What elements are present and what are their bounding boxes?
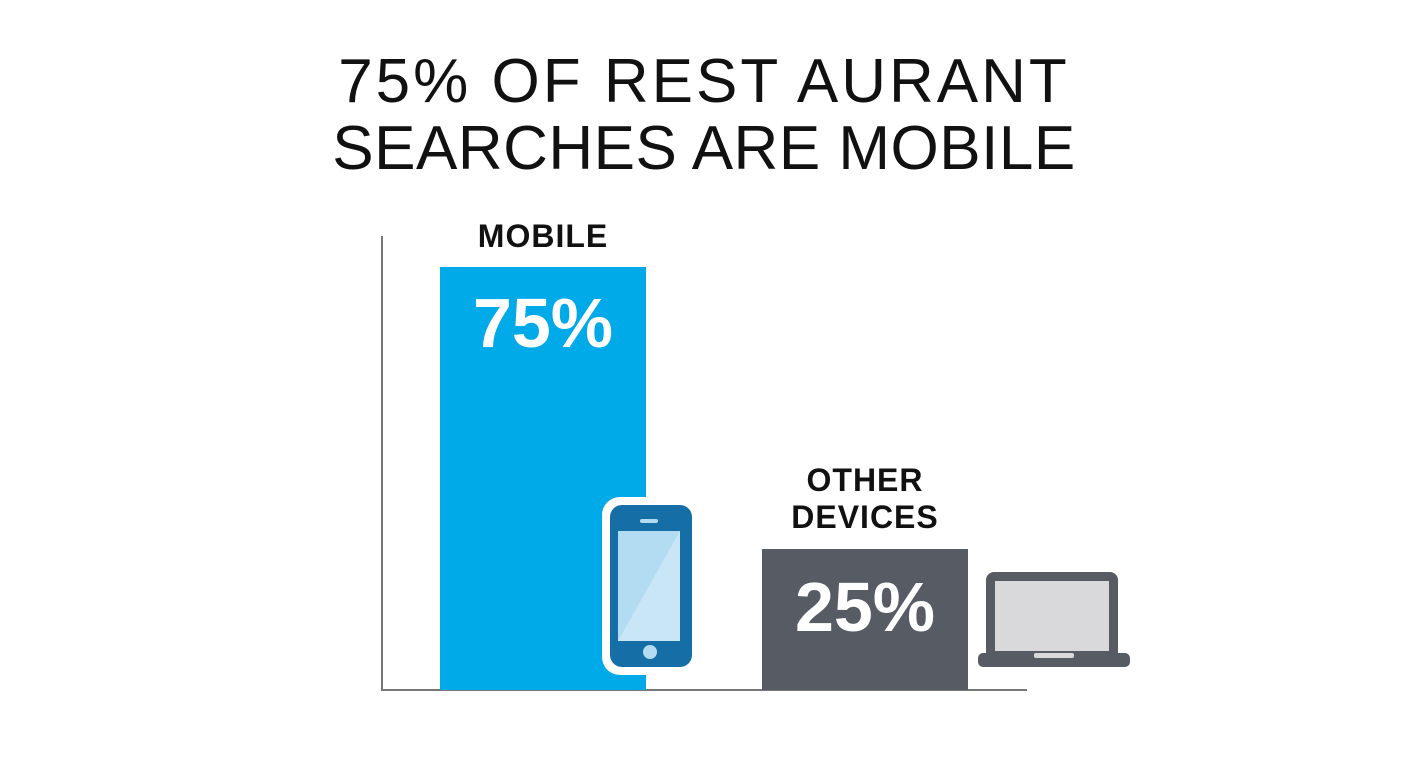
- icon: phone: [602, 497, 692, 675]
- label: other devices: DEVICES: [791, 499, 939, 535]
- title: [332, 47, 1076, 183]
- title: 75% OF REST AURANT: [338, 47, 1070, 116]
- icon: laptop: [978, 572, 1130, 667]
- chart axes: [381, 236, 383, 691]
- bar: mobile: [440, 267, 646, 690]
- value: 75%: 75%: [473, 284, 613, 362]
- title: SEARCHES ARE MOBILE: [332, 114, 1076, 183]
- bar: other devices: [762, 549, 968, 690]
- label: other devices: [791, 462, 939, 535]
- label: mobile: MOBILE: [478, 218, 608, 254]
- label: other devices: OTHER: [806, 462, 924, 498]
- value: 25%: 25%: [795, 568, 935, 646]
